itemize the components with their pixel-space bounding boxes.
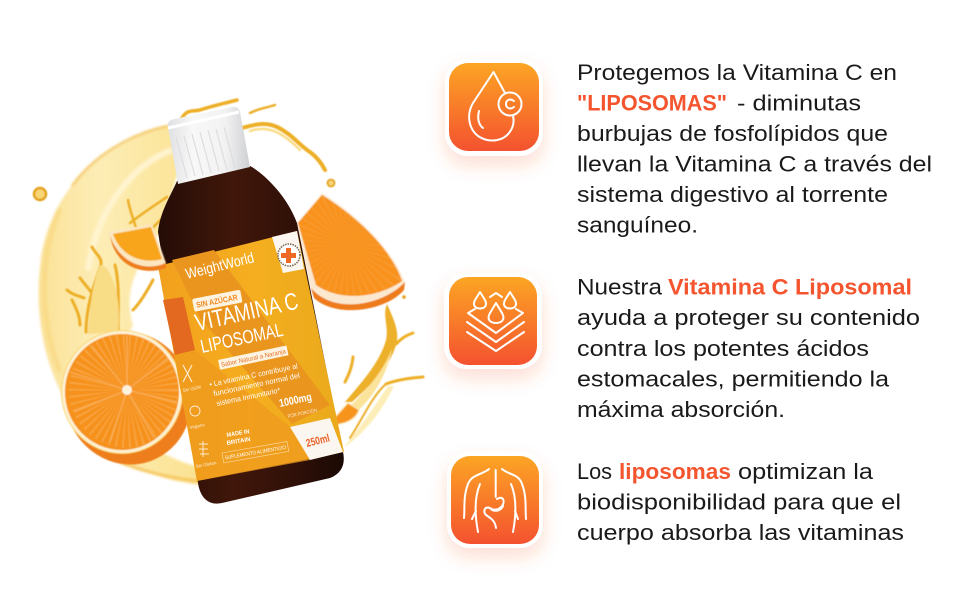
icon: liquid drop with vitamin C xyxy=(445,59,543,156)
liquid swirl background xyxy=(39,124,212,486)
text block: vitamina C liposomal: Nuestra xyxy=(577,274,663,300)
label text: Sin OGM xyxy=(182,384,202,393)
label text: SUPLEMENTO ALIMENTICIO xyxy=(224,445,287,462)
label text: 250ml xyxy=(305,432,331,450)
seal badge xyxy=(278,244,300,266)
label text: Sin Gluten xyxy=(195,460,217,469)
bottle body xyxy=(158,166,344,504)
text block: vitamina C liposomal: estomacales, permitiendo la xyxy=(577,366,890,392)
label text: VITAMINA C xyxy=(192,288,301,337)
product bottle xyxy=(158,107,344,504)
label text: Vegano xyxy=(189,422,206,430)
label text: LIPOSOMAL xyxy=(199,320,285,358)
text block: biodisponibilidad: biodisponibilidad para que el xyxy=(577,490,901,514)
text block: biodisponibilidad: optimizan la xyxy=(738,459,874,484)
label text: POR PORCIÓN xyxy=(287,407,318,420)
label text: • La vitamina C contribuye al xyxy=(209,361,299,389)
orange wedge right xyxy=(297,193,405,310)
text block: liposomas: sistema digestivo al torrente xyxy=(577,182,888,207)
text block: liposomas: "LIPOSOMAS" xyxy=(577,90,727,116)
text block: vitamina C liposomal: ayuda a proteger su contenido xyxy=(577,305,920,330)
orange wedge left xyxy=(108,224,166,271)
text block: liposomas: Protegemos la Vitamina C en xyxy=(577,60,897,85)
label text: sistema inmunitario* xyxy=(216,386,281,408)
text block: biodisponibilidad: cuerpo absorba las vitaminas xyxy=(577,520,904,545)
label text: MADE IN xyxy=(226,429,250,439)
text block: vitamina C liposomal: contra los potentes ácidos xyxy=(577,336,869,361)
bottle cap xyxy=(168,107,250,184)
text block: liposomas: llevan la Vitamina C a través del xyxy=(577,152,932,176)
label text: SIN AZÚCAR xyxy=(195,293,239,310)
text block: liposomas xyxy=(577,60,932,238)
orange half xyxy=(60,330,187,466)
label text: BRITAIN xyxy=(226,437,251,447)
text block: liposomas: burbujas de fosfolípidos que xyxy=(577,121,888,146)
text block: liposomas: - diminutas xyxy=(737,90,861,116)
text block: vitamina C liposomal: máxima absorción. xyxy=(577,397,785,422)
icon: torso with stomach xyxy=(447,452,543,548)
label text: 1000mg xyxy=(278,391,313,410)
text block: vitamina C liposomal xyxy=(577,274,920,422)
text block: biodisponibilidad: Los xyxy=(577,459,612,484)
text block: biodisponibilidad xyxy=(577,459,904,545)
label text xyxy=(182,249,331,469)
text block: biodisponibilidad: liposomas xyxy=(619,459,731,484)
text block: liposomas: sanguíneo. xyxy=(577,212,698,238)
icon: protective layers with drops xyxy=(444,273,542,369)
label text: Sabor Natural a Naranja xyxy=(220,348,287,369)
orange small wedge lower right xyxy=(328,403,359,425)
label xyxy=(158,231,344,481)
liquid splashes xyxy=(34,100,423,447)
label text: WeightWorld xyxy=(184,249,256,283)
label text: funcionamiento normal del xyxy=(213,371,301,398)
text block: vitamina C liposomal: Vitamina C Liposomal xyxy=(668,274,912,300)
